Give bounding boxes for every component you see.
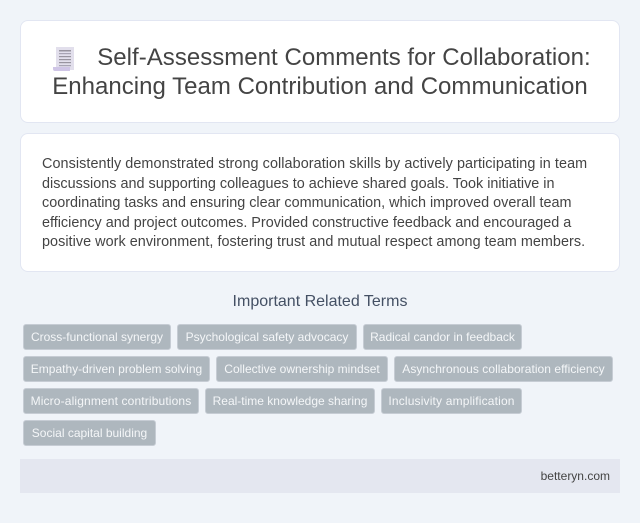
tag: Collective ownership mindset xyxy=(224,362,380,376)
tags: related terms xyxy=(23,324,613,446)
summary paragraph: positive work environment, fostering trust and mutual respect among team members. xyxy=(42,234,585,250)
tag: Micro-alignment contributions xyxy=(31,394,191,408)
panel: summary text card xyxy=(20,133,620,272)
tag: Psychological safety advocacy xyxy=(186,330,348,344)
tag: Asynchronous collaboration efficiency xyxy=(402,362,605,376)
tag xyxy=(23,388,199,414)
tag: Radical candor in feedback xyxy=(370,330,515,344)
title: Enhancing Team Contribution and Communication xyxy=(52,73,588,100)
tag: Social capital building xyxy=(32,426,147,440)
footer bar xyxy=(20,459,620,493)
tag xyxy=(205,388,375,414)
tag xyxy=(23,324,171,350)
title: Self-Assessment Comments for Collaboration: xyxy=(97,44,591,71)
tag: Empathy-driven problem solving xyxy=(31,362,202,376)
tag xyxy=(216,356,388,382)
tag xyxy=(23,420,156,446)
summary paragraph: efficiency and project outcomes. Provided constructive feedback and encouraged a xyxy=(42,215,571,231)
heading: related terms: Important Related Terms xyxy=(233,293,407,310)
summary paragraph: discussions and supporting colleagues to achieve shared goals. Took initiative in xyxy=(42,176,555,192)
title xyxy=(52,44,591,100)
tag xyxy=(23,356,210,382)
summary paragraph: Consistently demonstrated strong collaboration skills by actively participating in team xyxy=(42,156,587,172)
summary paragraph: coordinating tasks and ensuring clear communication, which improved overall team xyxy=(42,195,572,211)
footer site name: betteryn.com xyxy=(541,469,610,483)
icon: paper scroll xyxy=(53,47,74,71)
tag: Cross-functional synergy xyxy=(31,330,163,344)
tag xyxy=(381,388,522,414)
tag xyxy=(177,324,357,350)
panel: title card xyxy=(20,20,620,123)
tag: Real-time knowledge sharing xyxy=(213,394,367,408)
summary paragraph xyxy=(42,156,587,250)
tag: Inclusivity amplification xyxy=(388,394,515,408)
tag xyxy=(394,356,613,382)
tag xyxy=(363,324,522,350)
